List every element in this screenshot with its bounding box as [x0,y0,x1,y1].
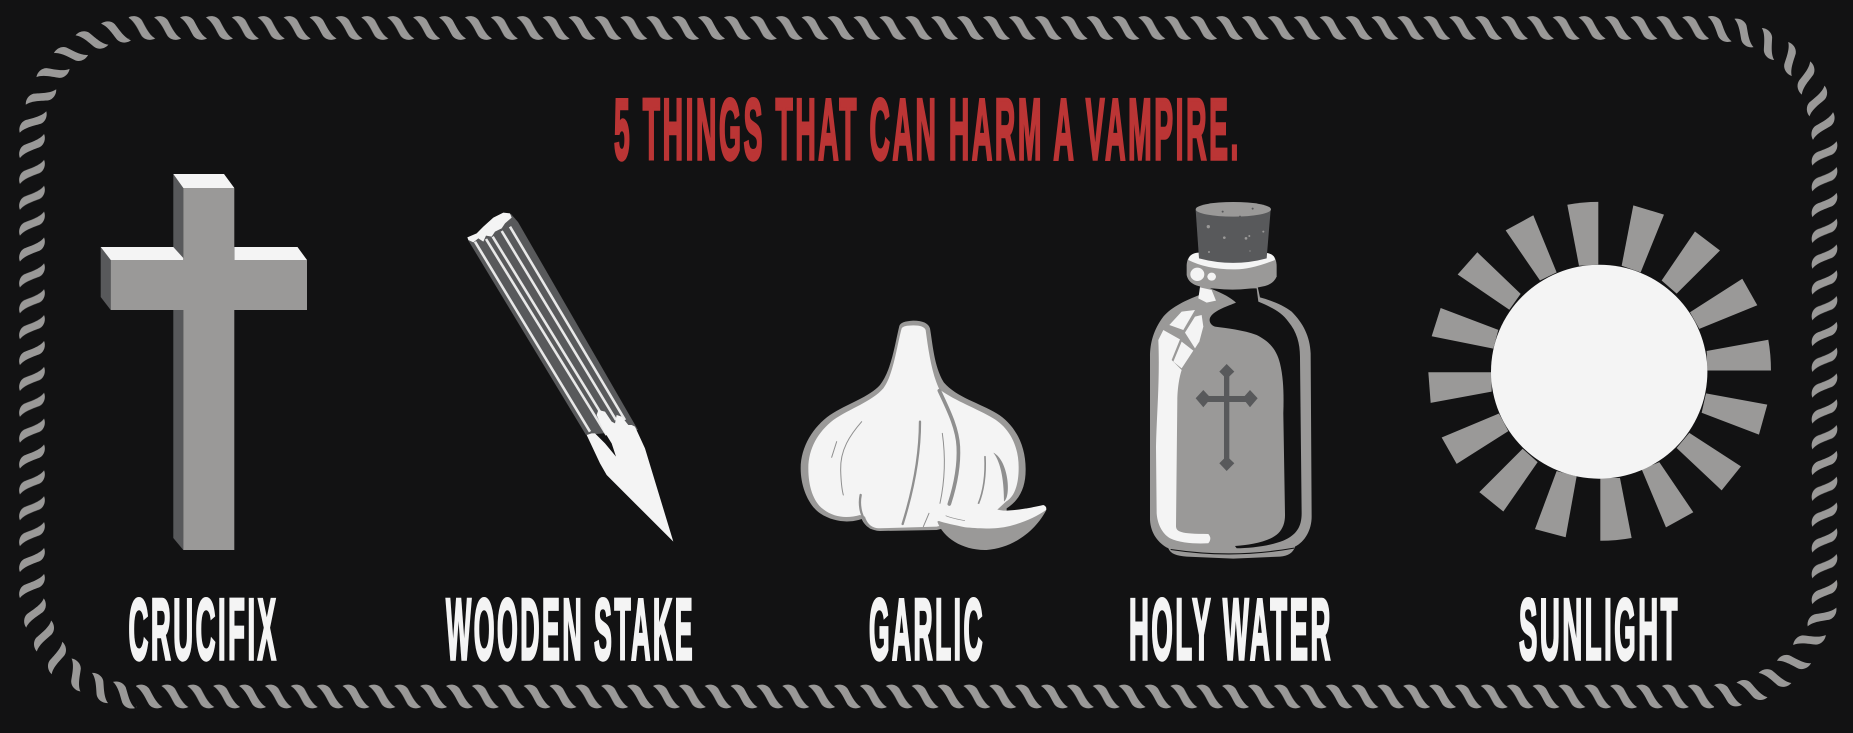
bottle cross [1196,364,1258,471]
text: GARLIC [869,582,985,678]
bottle highlights [1156,287,1216,544]
sun rays [1428,202,1771,541]
icon: garlic [801,321,1047,550]
icon: crucifix [101,174,307,550]
icon: sun [1428,202,1771,541]
text: HOLY WATER [1129,582,1333,678]
stake top [467,213,512,242]
icon: holy water bottle [1150,202,1312,559]
sun disc [1491,265,1707,479]
text: WOODEN STAKE [446,582,695,678]
cork [1196,210,1271,263]
text: CRUCIFIX [128,582,278,678]
collar [1187,253,1277,290]
stake point [587,410,673,542]
icon: wooden stake [467,213,673,542]
